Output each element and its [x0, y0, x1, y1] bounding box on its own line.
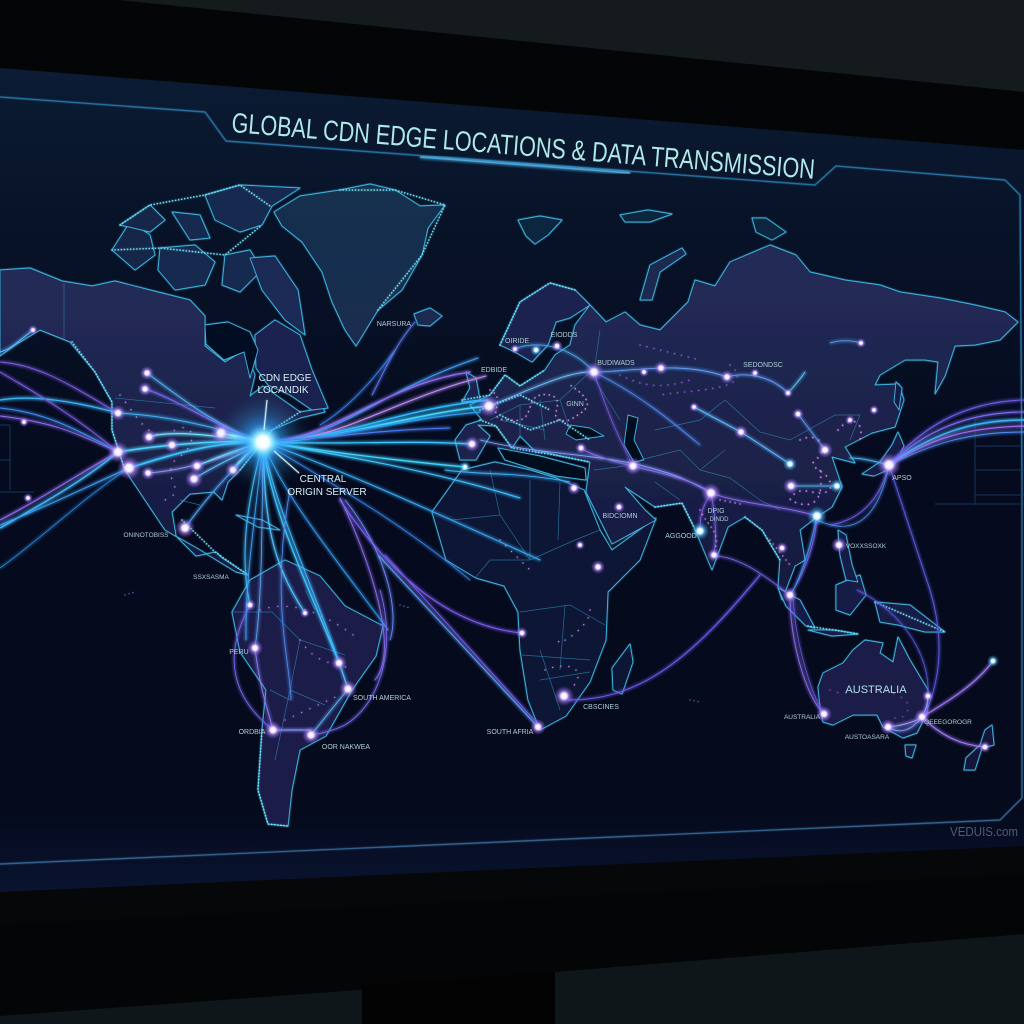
- flow lines origin to south america: [234, 442, 388, 735]
- country borders: [64, 283, 860, 760]
- edge node markers: [19, 325, 999, 753]
- label: narsura: NARSURA: [377, 321, 411, 328]
- label: dindd: DINDD: [710, 517, 729, 523]
- flow lines asia pacific: [712, 516, 993, 747]
- label: qeeegorogr: QEEEGOROGR: [924, 719, 972, 726]
- flow lines origin to europe: [263, 322, 760, 727]
- arctic island f: [172, 212, 210, 240]
- greenland: [274, 184, 445, 346]
- label: voxxssoxk: VOXXSSOXK: [846, 543, 887, 550]
- arctic island d: [158, 245, 215, 290]
- dotted coasts: [72, 185, 945, 826]
- callout leader lines: [264, 400, 299, 473]
- flow lines to west edge: [0, 330, 129, 568]
- new guinea: [875, 602, 945, 632]
- philippines: [838, 530, 858, 582]
- arctic island a: [112, 222, 155, 270]
- north america: [0, 268, 325, 575]
- caspian sea: [624, 415, 644, 462]
- label: ordbia: ORDBIA: [239, 729, 266, 736]
- australia: [818, 637, 928, 738]
- label: oiride: OIRIDE: [505, 338, 529, 345]
- label: south afria: SOUTH AFRIA: [487, 729, 534, 736]
- flow lines japan to east edge: [817, 400, 1024, 715]
- monitor stand: [362, 972, 555, 1024]
- flow lines origin to north america: [118, 373, 263, 528]
- label: apso: APSO: [892, 475, 912, 482]
- title underline highlight: [420, 157, 630, 173]
- label: eiodds: EIODDS: [551, 332, 578, 339]
- label: ssxsasma: SSXSASMA: [193, 574, 230, 581]
- label: oor nakwea: OOR NAKWEA: [322, 744, 370, 751]
- label: australia large: AUSTRALIA: [845, 684, 907, 696]
- tasmania: [905, 745, 916, 758]
- grid panels: [0, 420, 1024, 505]
- callout: cdn edge locations: CDN EDGE: [259, 373, 312, 384]
- arctic island c: [205, 185, 300, 232]
- callout: central origin server: CENTRAL: [300, 474, 347, 485]
- sakhalin: [894, 382, 902, 410]
- sumatra: [778, 588, 815, 628]
- british isles: [462, 372, 480, 402]
- label: budiwads: BUDIWADS: [597, 360, 635, 367]
- labrador and quebec: [255, 320, 328, 410]
- new zealand: [964, 725, 994, 770]
- screen frame: [0, 97, 1022, 864]
- africa: [432, 462, 656, 730]
- japan: [862, 432, 904, 476]
- hudson bay: [205, 322, 258, 378]
- scandinavia: [500, 283, 590, 362]
- eurasia: [455, 245, 1018, 600]
- arctic island e: [222, 250, 262, 292]
- title: GLOBAL CDN EDGE LOCATIONS & DATA TRANSMISSION: [231, 107, 816, 185]
- label: sedondsc: SEDONDSC: [743, 362, 783, 369]
- label: edbide: EDBIDE: [481, 367, 507, 374]
- borneo: [836, 575, 866, 615]
- madagascar: [612, 644, 633, 694]
- world map: [0, 184, 1018, 826]
- label: peru: PERU: [229, 649, 249, 656]
- label: dpig: DPIG: [707, 508, 725, 515]
- wall top right: [118, 0, 1024, 92]
- map labels: [123, 321, 972, 751]
- label: ginn: GINN: [566, 401, 584, 408]
- city lights: [120, 345, 908, 720]
- baffin island: [250, 256, 305, 335]
- label: australia small: AUSTRALIA: [784, 714, 821, 721]
- iceland: [414, 308, 442, 326]
- wall bottom: [0, 934, 1024, 1024]
- label: aggood: AGGOOD: [665, 533, 697, 540]
- label: south america: SOUTH AMERICA: [353, 695, 411, 702]
- arctic island b: [120, 205, 165, 232]
- mediterranean sea: [498, 448, 586, 480]
- svalbard: [518, 216, 562, 244]
- flow lines eurasia: [445, 341, 861, 555]
- franz josef land: [620, 210, 672, 222]
- label: austoasara: AUSTOASARA: [845, 734, 890, 741]
- south america: [232, 560, 383, 826]
- central origin server node: [235, 414, 291, 470]
- novaya zemlya: [640, 248, 686, 300]
- continents fill: [0, 184, 1018, 826]
- callout: cdn edge locations line 2: LOCANDIK: [257, 385, 309, 396]
- origin glow: [219, 398, 307, 486]
- black sea: [566, 425, 604, 440]
- callout: central origin server line 2: ORIGIN SERVER: [287, 487, 367, 498]
- label: cbscines: CBSCINES: [583, 704, 619, 711]
- label: oninotobiss: ONINOTOBISS: [123, 532, 169, 539]
- cuba: [236, 515, 280, 530]
- severnaya zemlya: [752, 218, 786, 240]
- java: [808, 630, 858, 636]
- label: bidciomn: BIDCIOMN: [602, 513, 638, 520]
